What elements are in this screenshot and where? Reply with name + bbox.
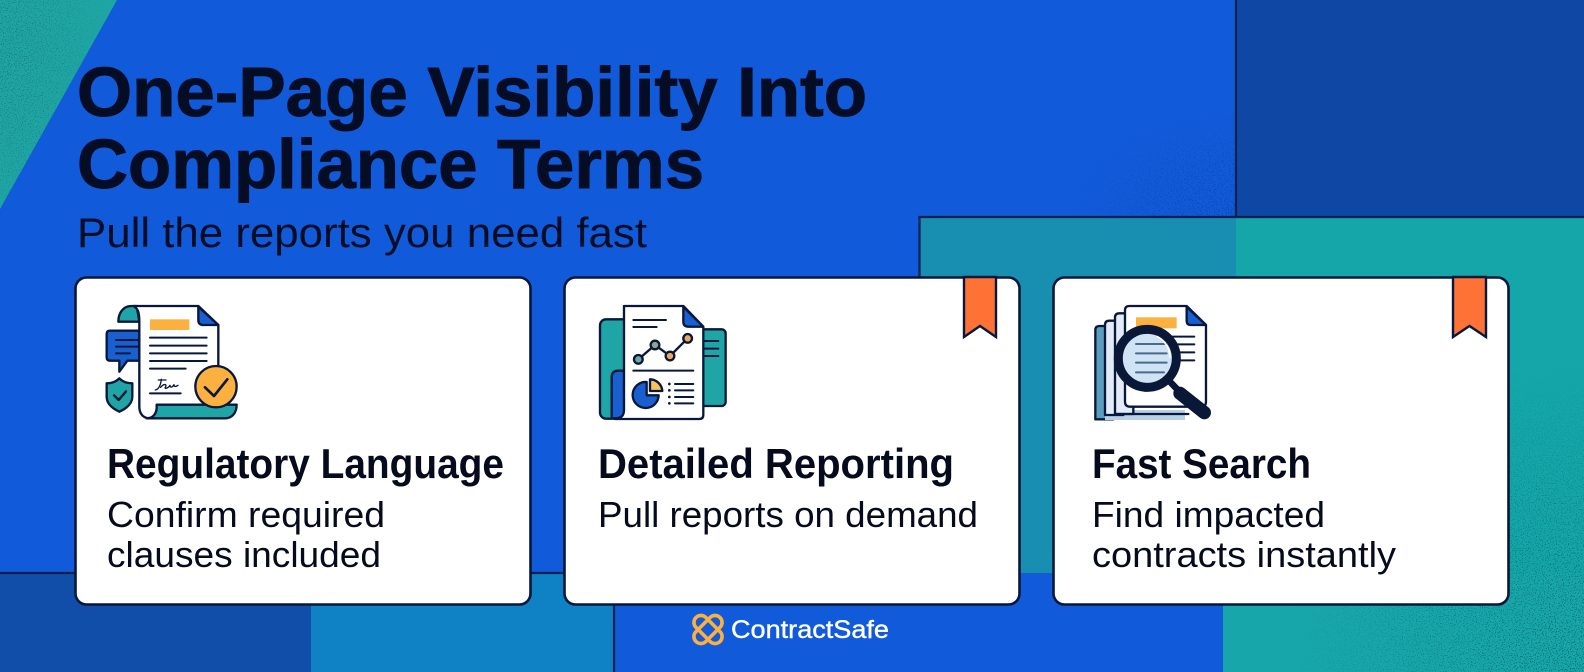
heading: Fast Search	[1092, 440, 1311, 487]
title: Compliance Terms	[77, 125, 704, 203]
logo: ContractSafe	[691, 613, 889, 646]
panel: regulatory language	[76, 278, 530, 604]
body text: clauses included	[107, 534, 381, 575]
heading: Detailed Reporting	[598, 440, 954, 487]
body text: Confirm required	[107, 494, 385, 535]
body text	[107, 494, 385, 575]
card background	[564, 278, 1020, 604]
heading: Regulatory Language	[107, 440, 504, 487]
body text: Pull reports on demand	[598, 494, 978, 535]
panel: fast search	[1054, 277, 1508, 604]
card background	[1054, 278, 1508, 604]
card background	[76, 278, 530, 604]
title: One-Page Visibility Into	[77, 53, 867, 131]
icon: report with charts	[600, 306, 726, 419]
body text: contracts instantly	[1092, 534, 1396, 575]
body text	[1092, 494, 1396, 575]
title	[77, 53, 867, 203]
subtitle: Pull the reports you need fast	[77, 209, 647, 256]
bookmark ribbon	[964, 277, 996, 337]
bookmark ribbon	[1453, 277, 1486, 337]
panel: detailed reporting	[564, 277, 1020, 604]
logo wordmark: ContractSafe	[731, 616, 889, 644]
body text: Find impacted	[1092, 494, 1325, 535]
icon: logo mark	[691, 613, 725, 646]
icon: signed document with check	[107, 306, 237, 418]
icon: magnifier over documents	[1095, 306, 1206, 420]
